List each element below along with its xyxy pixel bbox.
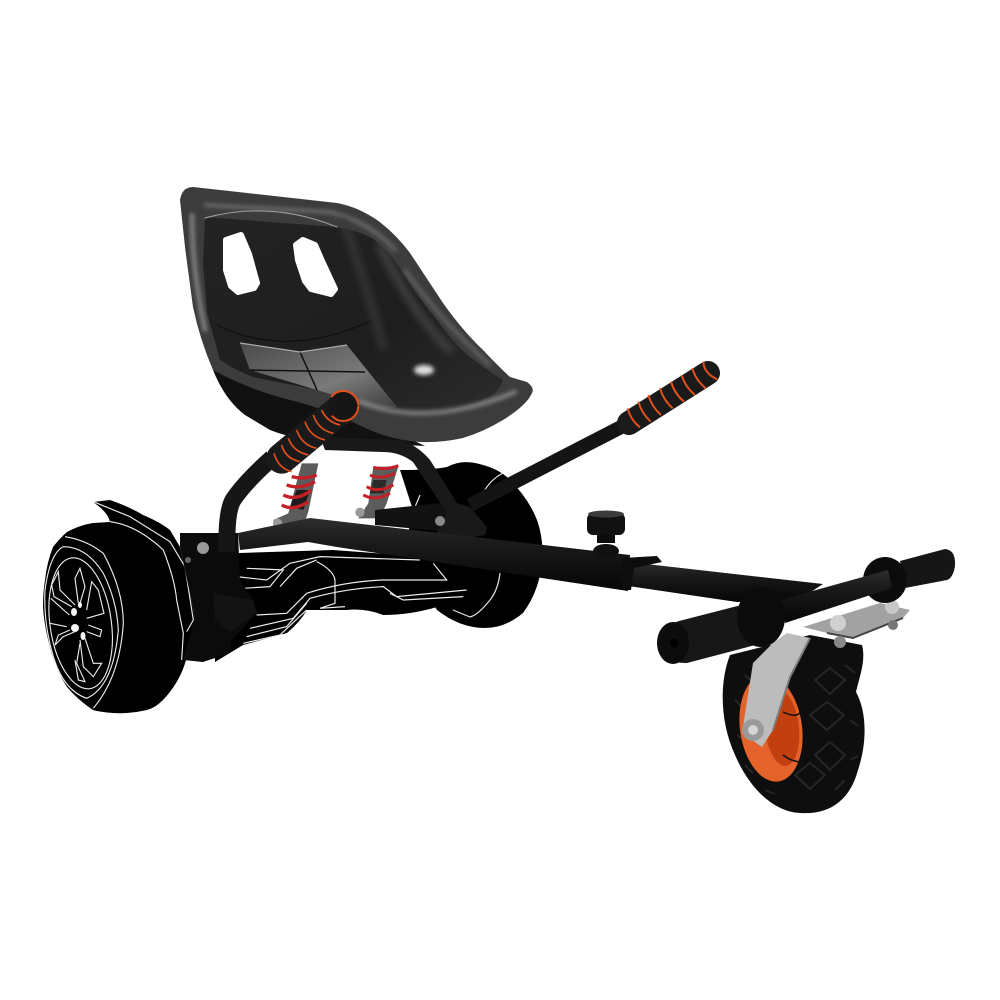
caster fork: [742, 633, 810, 747]
wheel hub bolts: [71, 602, 86, 640]
orange hub: [733, 670, 809, 786]
left spring shock: [273, 463, 318, 530]
main chassis tube: [238, 518, 823, 602]
telescopic collar: [622, 556, 662, 590]
seat support frame: [227, 437, 487, 552]
seat: [180, 187, 533, 446]
wheel rim lines: [41, 502, 193, 708]
seat grip: [274, 391, 358, 472]
rear cross tube: [375, 502, 450, 532]
lever grip: [628, 362, 717, 427]
seat hole right: [296, 240, 335, 294]
tyre tread pattern: [735, 665, 858, 794]
clamp bolts: [197, 542, 209, 554]
right grip: [863, 549, 955, 603]
hoverboard body: [215, 550, 490, 662]
front cross handlebar: [657, 549, 955, 664]
adjustment knob: [587, 510, 625, 558]
caster wheel: [723, 635, 865, 813]
seat hole left: [226, 235, 257, 292]
body circuit lines: [237, 557, 467, 643]
seat rim: [180, 187, 533, 442]
seat inner shell: [203, 217, 503, 413]
seat pan panels: [240, 343, 397, 410]
far hoverboard wheel: [400, 462, 542, 628]
near hoverboard wheel with fender: [41, 500, 195, 713]
steering lever: [470, 362, 717, 505]
hoverboard clamp: [180, 533, 257, 662]
caster mounting plate: [803, 600, 910, 648]
left grip: [657, 587, 785, 664]
seat underside bowl: [213, 370, 425, 446]
seat rim highlights: [192, 205, 515, 413]
right spring shock: [355, 466, 398, 518]
